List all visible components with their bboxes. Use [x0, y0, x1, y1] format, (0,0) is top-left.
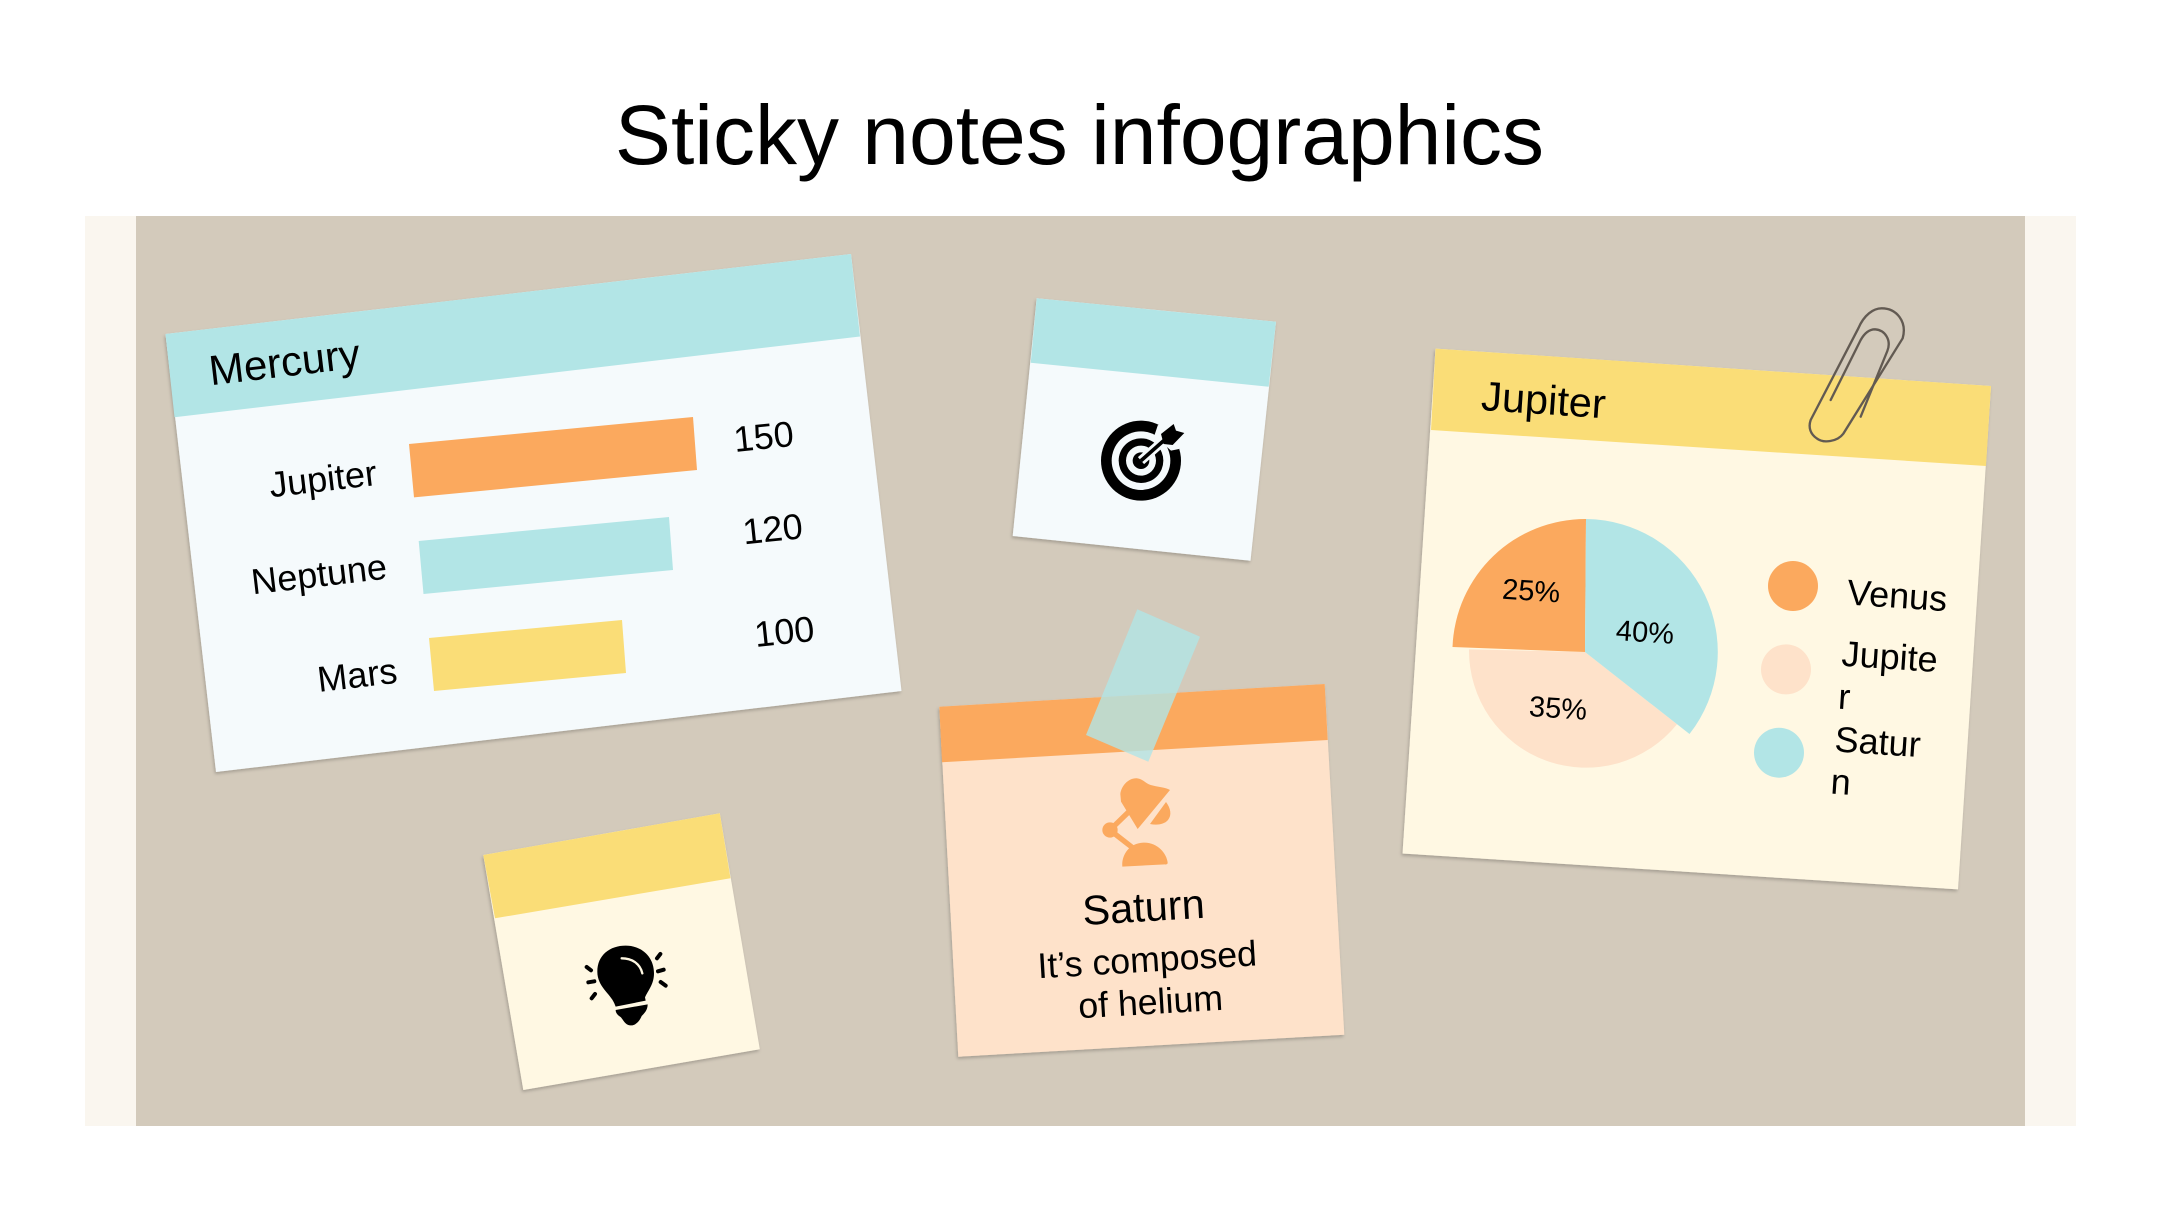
title: Sticky notes infographics — [615, 88, 1544, 182]
bar: Jupiter — [409, 417, 697, 497]
text: description: of helium — [1077, 978, 1224, 1026]
heading: Mercury: Mercury — [206, 330, 362, 394]
legend: Jupiter: r — [1837, 676, 1852, 717]
slice: 35% — [1469, 649, 1677, 768]
icon: target with dart — [1101, 417, 1187, 501]
value: 120: 120 — [741, 505, 805, 552]
value: 100: 100 — [752, 608, 816, 655]
label: Jupiter: Jupiter — [267, 452, 379, 505]
tape — [1086, 609, 1200, 762]
panel: target note — [1013, 298, 1276, 561]
text: description: It’s composed — [1036, 933, 1258, 986]
legend: Jupiter — [1761, 633, 1939, 717]
legend: Venus — [1768, 561, 1949, 619]
heading: Saturn: Saturn — [1081, 880, 1206, 934]
panel: Jupiter pie chart note — [1402, 308, 1991, 889]
legend — [1754, 561, 1949, 803]
panel: Saturn note — [939, 609, 1344, 1057]
label: 25%: 25% — [1501, 574, 1561, 609]
corkboard background — [85, 216, 2076, 1126]
label: 40%: 40% — [1615, 615, 1675, 651]
bar: Mars — [429, 620, 626, 691]
icon: paperclip — [1810, 308, 1904, 441]
note header — [483, 813, 730, 918]
panel: Mercury bar chart note — [166, 254, 902, 772]
legend: Saturn: n — [1829, 761, 1852, 803]
note header — [939, 684, 1328, 762]
note header — [1431, 349, 1991, 466]
note body — [166, 254, 902, 772]
legend: Saturn: Satur — [1833, 718, 1922, 765]
note body — [1402, 349, 1991, 889]
slice: 40% — [1585, 519, 1718, 734]
note body — [939, 684, 1344, 1057]
slice: 25% — [1452, 519, 1586, 652]
label: Neptune: Neptune — [249, 546, 389, 602]
note header — [166, 254, 860, 417]
legend: Jupiter: Jupite — [1840, 633, 1939, 680]
value: 150: 150 — [732, 413, 796, 460]
legend: Venus: Venus — [1846, 572, 1949, 619]
label: Mars: Mars — [315, 650, 399, 700]
legend: Saturn — [1754, 718, 1922, 803]
bar chart — [249, 413, 816, 700]
panel: lightbulb note — [483, 813, 760, 1090]
heading: Jupiter: Jupiter — [1480, 372, 1607, 427]
label: 35%: 35% — [1528, 691, 1588, 727]
icon: lightbulb — [587, 946, 666, 1025]
bar: Neptune — [419, 517, 673, 594]
note body — [483, 813, 760, 1090]
note header — [1031, 298, 1276, 387]
pie chart — [1452, 519, 1718, 768]
text: description — [1036, 933, 1258, 1026]
note body — [1013, 298, 1276, 561]
icon: desk lamp — [1102, 778, 1170, 867]
